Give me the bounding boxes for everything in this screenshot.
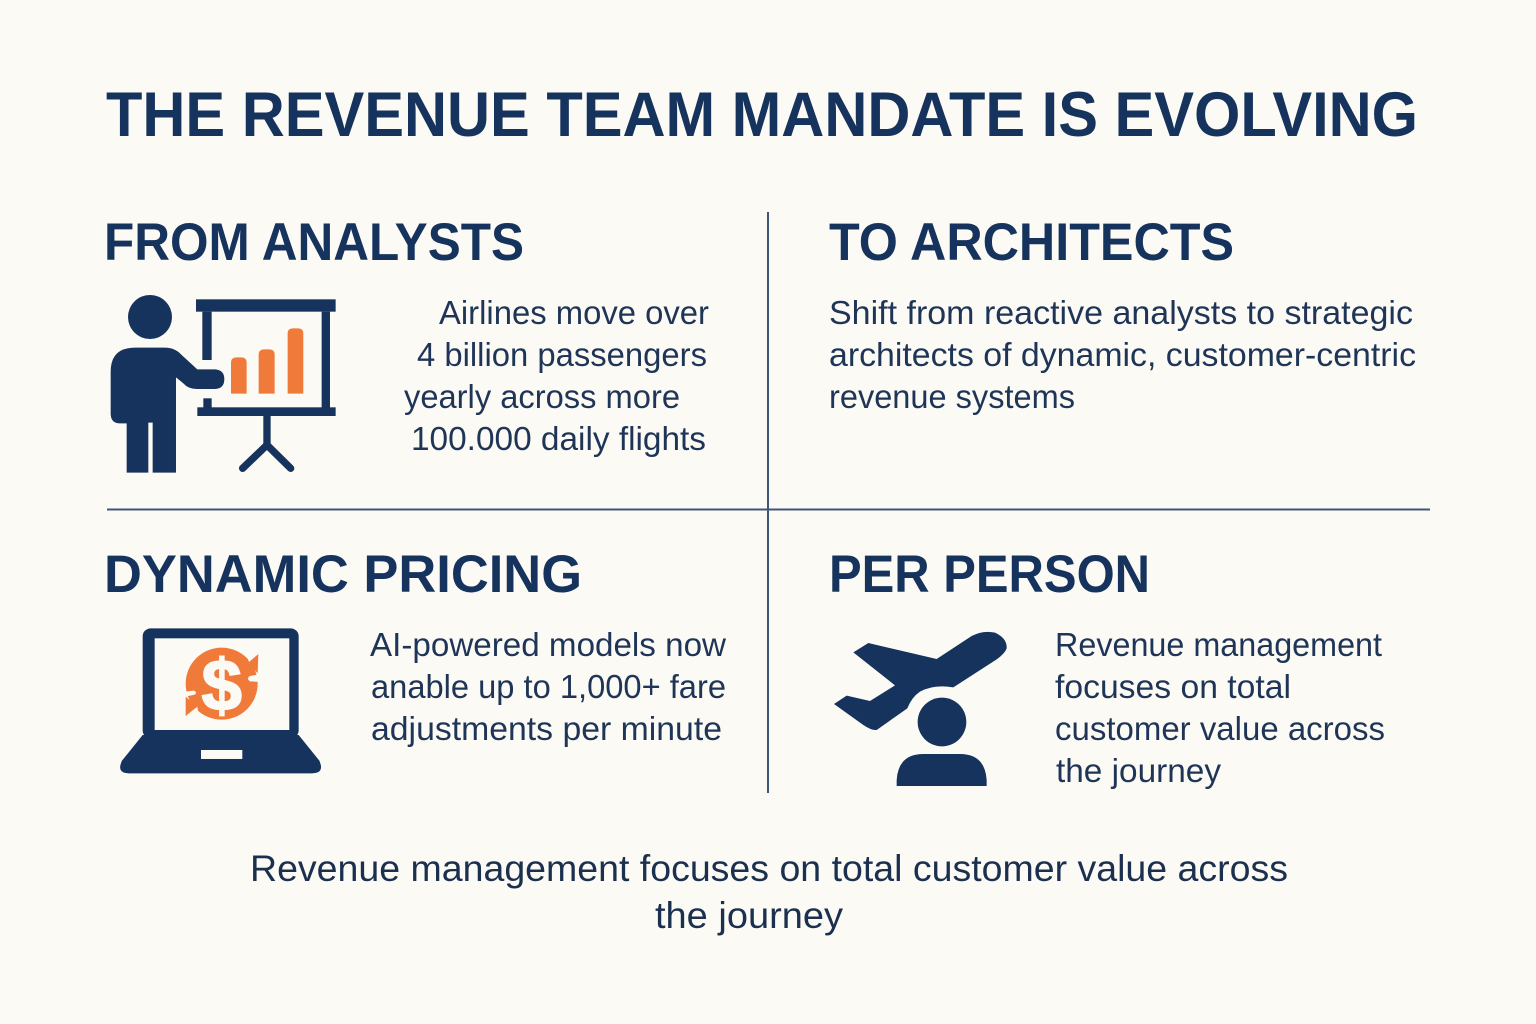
text block: strategic architects (829, 294, 1416, 415)
text block: airline passengers: 4 billion passengers (417, 336, 707, 373)
text block: airline passengers (404, 294, 709, 457)
heading: from analysts: FROM ANALYSTS (104, 213, 524, 272)
text block: airline passengers: 100.000 daily flights (411, 420, 706, 457)
text block: total customer value (1055, 626, 1385, 789)
footer statement: the journey (655, 895, 844, 936)
title: THE REVENUE TEAM MANDATE IS EVOLVING (106, 80, 1418, 150)
footer statement (250, 848, 1288, 936)
icon: laptop with dollar sign: $ (201, 645, 242, 726)
text block: airline passengers: yearly across more (404, 378, 680, 415)
panel: from analysts (104, 213, 709, 473)
icon: presenter with bar chart (111, 295, 336, 473)
text block: strategic architects: architects of dynamic, customer-centric (829, 336, 1416, 373)
text block: total customer value: customer value across (1055, 710, 1385, 747)
text block: airline passengers: Airlines move over (439, 294, 709, 331)
text block: total customer value: focuses on total (1055, 668, 1291, 705)
panel: to architects (829, 213, 1416, 415)
text block: strategic architects: Shift from reactive analysts to strategic (829, 294, 1413, 331)
text block: total customer value: the journey (1056, 752, 1221, 789)
heading: dynamic pricing: DYNAMIC PRICING (104, 545, 582, 604)
text block: ai-powered models: AI-powered models now (370, 626, 726, 663)
text block: ai-powered models (370, 626, 726, 747)
footer statement: Revenue management focuses on total customer value across (250, 848, 1288, 889)
text block: strategic architects: revenue systems (829, 378, 1075, 415)
text block: ai-powered models: adjustments per minute (371, 710, 722, 747)
panel: per person (829, 545, 1385, 789)
panel: dynamic pricing (104, 545, 726, 773)
icon: laptop with dollar sign (120, 628, 321, 773)
icon: airplane above person (834, 632, 1007, 786)
text block: ai-powered models: anable up to 1,000+ fare (371, 668, 726, 705)
text block: total customer value: Revenue management (1055, 626, 1382, 663)
heading: per person: PER PERSON (829, 545, 1150, 604)
heading: to architects: TO ARCHITECTS (829, 213, 1234, 272)
